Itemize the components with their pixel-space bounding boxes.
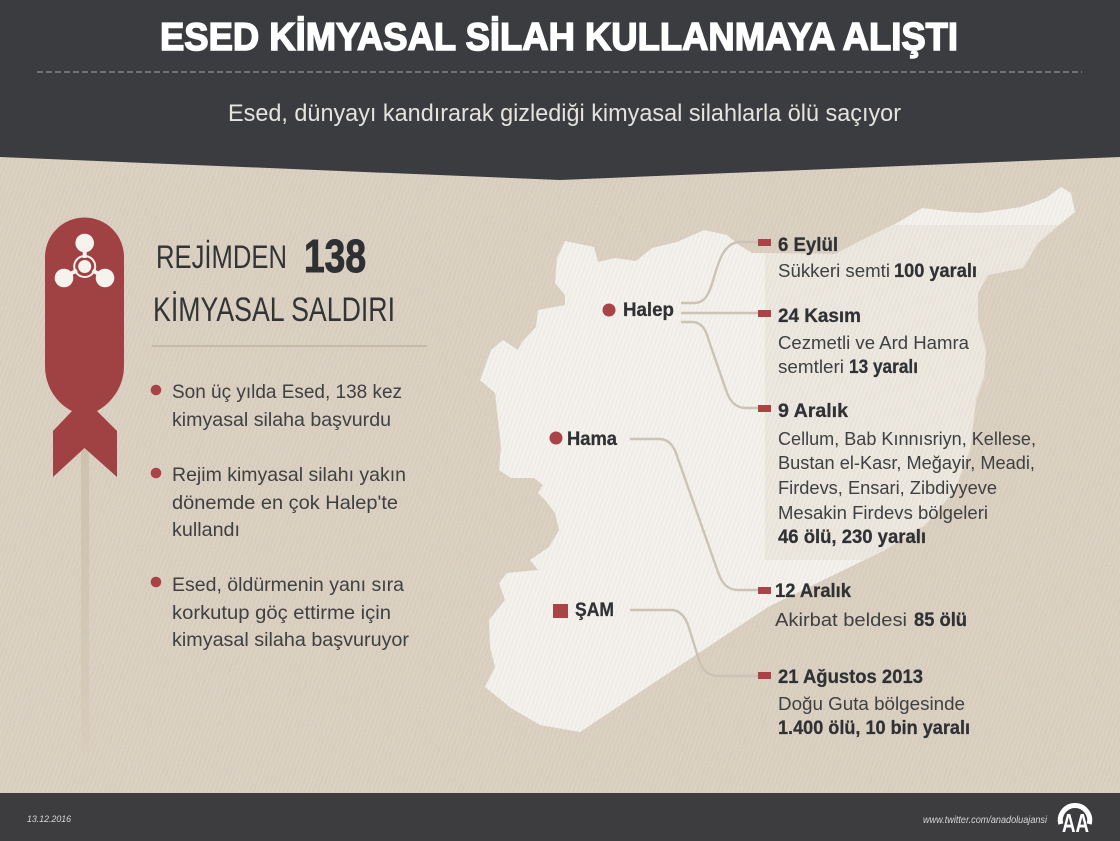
event: 9 Aralık: Cellum, Bab Kınnısriyn, Kellese,: [778, 428, 1036, 449]
bullet 3: Esed, öldürmenin yanı sıra: [172, 574, 404, 596]
city: Şam: [553, 600, 614, 621]
logo: AA: AA: [1062, 808, 1089, 838]
header band: [0, 0, 1120, 180]
event: 12 Aralık: 85 ölü: [914, 610, 967, 631]
heading: 138 attacks: REJİMDEN: [156, 239, 287, 275]
bullet list: [151, 381, 409, 651]
event: 6 Eylül: [758, 235, 977, 282]
heading: 138 attacks: 138: [304, 230, 366, 282]
title: ESED KİMYASAL SİLAH KULLANMAYA ALIŞTI: [160, 16, 958, 59]
event: 24 Kasım: semtleri: [778, 356, 844, 377]
event: 9 Aralık: 9 Aralık: [778, 401, 848, 422]
bullet 1: Son üç yılda Esed, 138 kez: [172, 381, 402, 403]
event: 24 Kasım: Cezmetli ve Ard Hamra: [778, 332, 970, 353]
heading: 138 attacks: KİMYASAL SALDIRI: [153, 291, 395, 329]
event: 12 Aralık: Akirbat beldesi: [775, 609, 907, 630]
bullet 2: dönemde en çok Halep'te: [172, 492, 398, 514]
event: 24 Kasım: 13 yaralı: [849, 357, 918, 378]
event: 24 Kasım: [758, 306, 970, 378]
city: Hama: Hama: [567, 429, 617, 450]
event: 9 Aralık: [758, 401, 1036, 548]
event: 21 Ağustos 2013: [758, 667, 970, 739]
event: 21 Ağustos 2013: 1.400 ölü, 10 bin yaralı: [778, 718, 970, 739]
event: 6 Eylül: Sükkeri semti: [778, 260, 890, 281]
bullet 3: [151, 574, 409, 651]
bullet 1: [151, 381, 402, 431]
source url: www.twitter.com/anadoluajansi: [923, 815, 1048, 826]
city: Şam: ŞAM: [575, 600, 614, 621]
city: Halep: Halep: [623, 300, 674, 321]
event: 9 Aralık: Firdevs, Ensari, Zibdiyyeve: [778, 477, 997, 498]
connector lines: [630, 242, 758, 676]
bullet 2: Rejim kimyasal silahı yakın: [172, 464, 406, 486]
event: 9 Aralık: Mesakin Firdevs bölgeleri: [778, 502, 988, 523]
logo: AA: [1060, 805, 1090, 838]
subtitle: Esed, dünyayı kandırarak gizlediği kimyasal silahlarla ölü saçıyor: [228, 100, 901, 127]
bullet 1: kimyasal silaha başvurdu: [172, 409, 391, 431]
icon: chemical weapon symbol: [55, 234, 114, 287]
event: 6 Eylül: 6 Eylül: [778, 235, 838, 256]
date: 13.12.2016: [27, 814, 72, 825]
event: 21 Ağustos 2013: 21 Ağustos 2013: [778, 667, 923, 688]
map of Syria: [470, 180, 1095, 740]
bomb illustration: [45, 218, 124, 477]
bullet 2: kullandı: [172, 519, 240, 541]
event: 12 Aralık: 12 Aralık: [775, 581, 851, 602]
bullet 3: kimyasal silaha başvuruyor: [172, 629, 409, 651]
event: 21 Ağustos 2013: Doğu Guta bölgesinde: [778, 693, 965, 714]
bomb pole: [81, 440, 89, 752]
event: 12 Aralık: [758, 581, 967, 631]
event: 9 Aralık: 46 ölü, 230 yaralı: [778, 527, 926, 548]
heading: 138 attacks: [153, 230, 395, 329]
event: 24 Kasım: 24 Kasım: [778, 306, 861, 327]
event: 9 Aralık: Bustan el-Kasr, Meğayir, Meadi,: [778, 452, 1035, 473]
footer band: [0, 793, 1120, 841]
event: 6 Eylül: 100 yaralı: [894, 261, 977, 282]
bullet 3: korkutup göç ettirme için: [172, 602, 391, 624]
bullet 2: [151, 464, 406, 541]
